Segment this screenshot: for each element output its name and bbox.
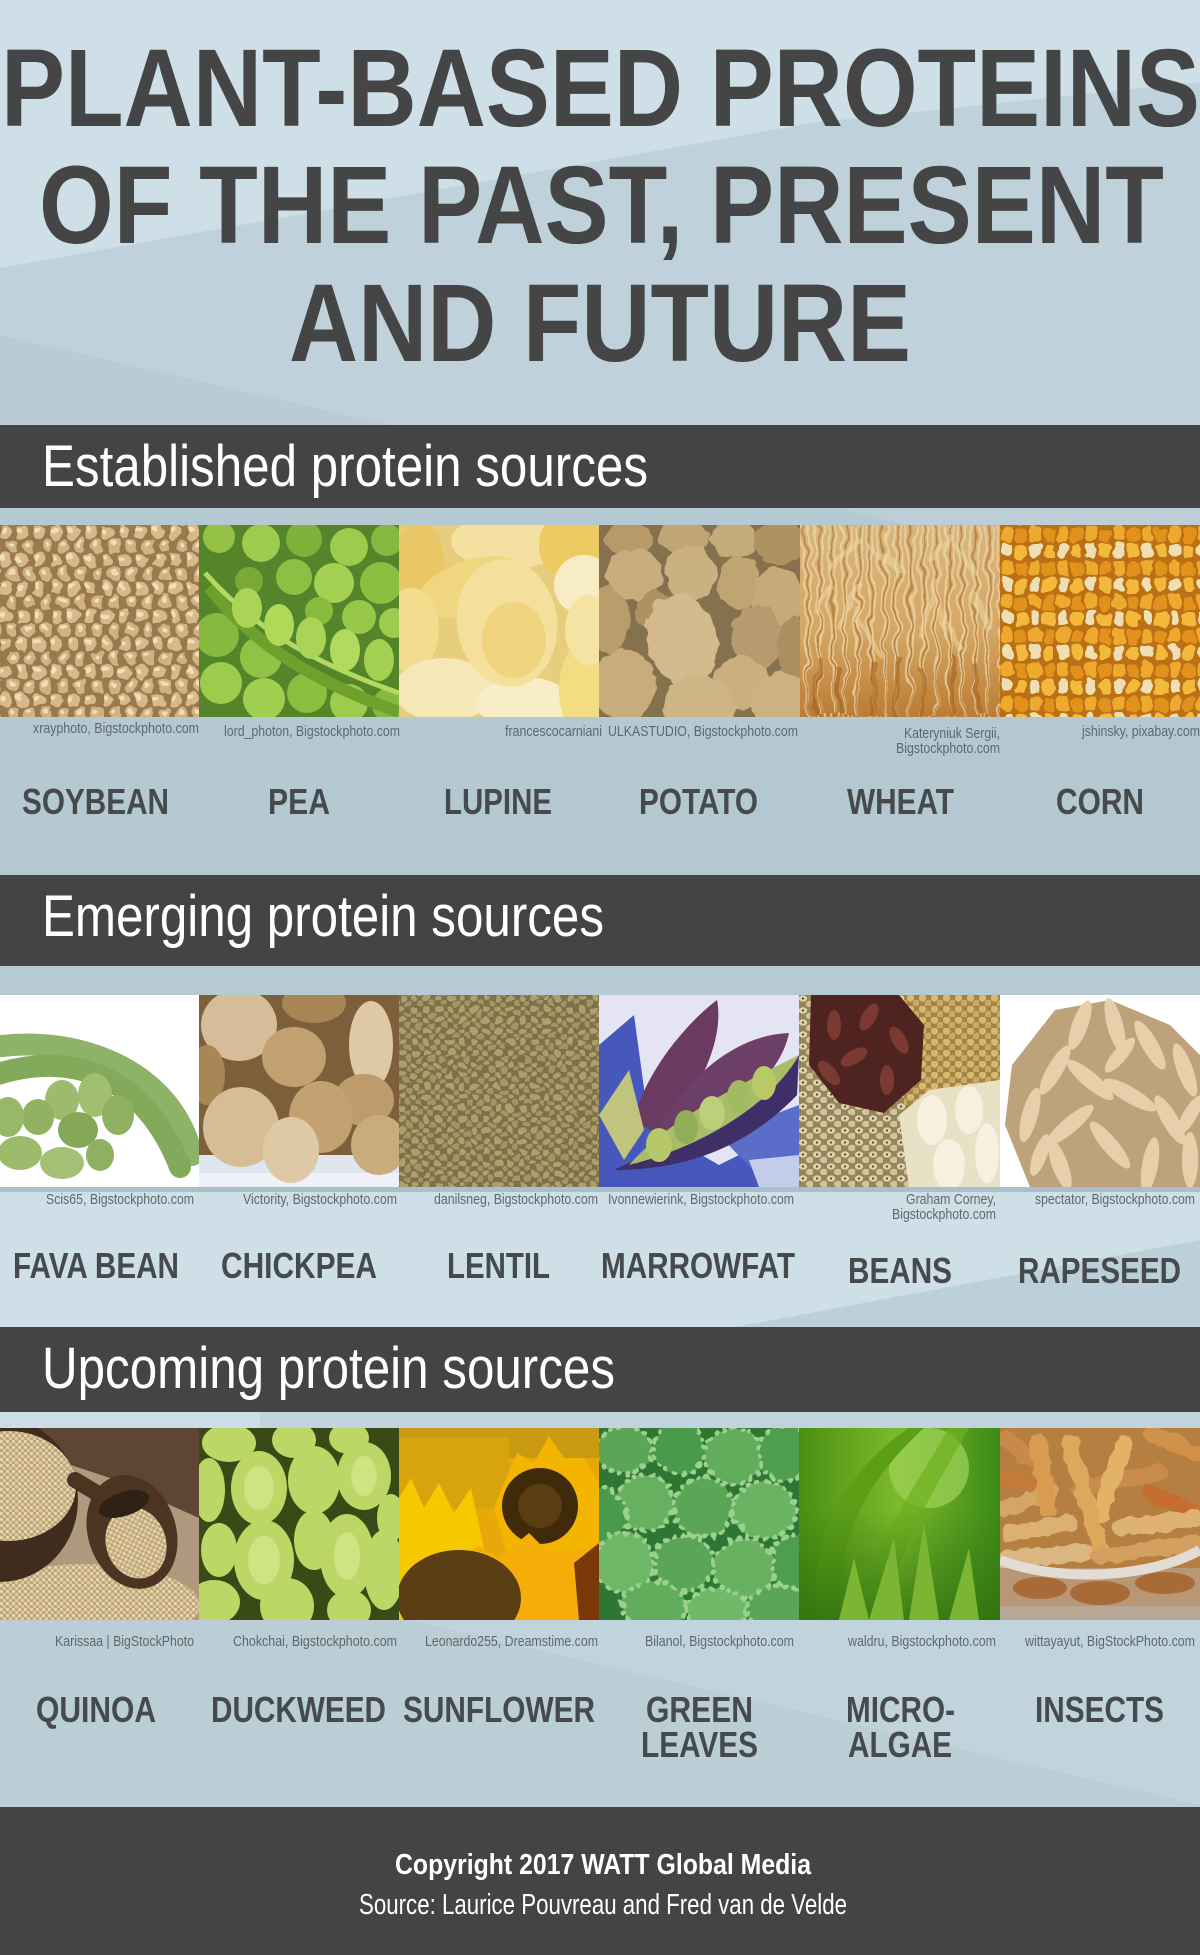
section header: established: [0, 425, 1200, 508]
label: soybean: SOYBEAN: [22, 781, 169, 822]
photo: fava bean: [0, 995, 199, 1187]
label: lupine: LUPINE: [444, 781, 552, 822]
footer: Copyright 2017 WATT Global Media: [395, 1849, 812, 1881]
credit: lentil: danilsneg, Bigstockphoto.com: [434, 1191, 598, 1208]
credit: duckweed: Chokchai, Bigstockphoto.com: [233, 1633, 397, 1650]
photo: pea: [199, 525, 399, 717]
credit: green leaves: Bilanol, Bigstockphoto.com: [645, 1633, 794, 1650]
credit: chickpea: Victority, Bigstockphoto.com: [243, 1191, 397, 1208]
label: duckweed: DUCKWEED: [211, 1689, 386, 1730]
photo: marrowfat: [599, 995, 799, 1187]
credit: beans: Bigstockphoto.com: [892, 1206, 996, 1223]
credit: wheat: Bigstockphoto.com: [896, 740, 1000, 757]
section header: established: Established protein sources: [42, 434, 648, 499]
title: AND FUTURE: [289, 262, 911, 385]
credit: wheat: Kateryniuk Sergii,: [904, 725, 1000, 742]
label: fava bean: FAVA BEAN: [13, 1245, 179, 1286]
label: micro-algae: MICRO-: [846, 1689, 955, 1730]
photo: rapeseed: [1000, 995, 1200, 1187]
credit: quinoa: Karissaa | BigStockPhoto: [55, 1633, 194, 1650]
credit: fava bean: Scis65, Bigstockphoto.com: [46, 1191, 194, 1208]
label: pea: PEA: [268, 781, 330, 822]
photo: beans: [799, 995, 1000, 1187]
credit: sunflower: Leonardo255, Dreamstime.com: [425, 1633, 598, 1650]
label: micro-algae: ALGAE: [848, 1724, 952, 1765]
section header: upcoming: [0, 1327, 1200, 1412]
label: sunflower: SUNFLOWER: [403, 1689, 595, 1730]
photo: quinoa: [0, 1428, 199, 1620]
photo: duckweed: [199, 1428, 399, 1620]
photo: lupine: [399, 525, 599, 717]
photo: sunflower: [399, 1428, 599, 1620]
credit: pea: lord_photon, Bigstockphoto.com: [224, 723, 400, 740]
label: wheat: WHEAT: [847, 781, 954, 822]
photo: microalgae: [799, 1428, 1000, 1620]
credit: potato: ULKASTUDIO, Bigstockphoto.com: [608, 723, 798, 740]
photo: potato: [599, 525, 800, 717]
credit: beans: [892, 1191, 996, 1223]
photo: insects: [1000, 1428, 1200, 1620]
label: insects: INSECTS: [1035, 1689, 1164, 1730]
credit: lupine: francescocarniani: [505, 723, 602, 740]
label: quinoa: QUINOA: [36, 1689, 156, 1730]
photo: lentil: [399, 995, 599, 1187]
label: beans: BEANS: [848, 1250, 952, 1291]
section header: emerging: Emerging protein sources: [42, 884, 604, 949]
label: green leaves: [641, 1689, 758, 1765]
section header: upcoming: Upcoming protein sources: [42, 1336, 615, 1401]
photo: soybean: [0, 525, 199, 717]
credit: wheat: [896, 725, 1000, 757]
label: corn: CORN: [1056, 781, 1144, 822]
label: potato: POTATO: [639, 781, 758, 822]
title: [1, 27, 1200, 385]
label: green leaves: GREEN: [646, 1689, 753, 1730]
label: micro-algae: [846, 1689, 955, 1765]
section header: emerging: [0, 875, 1200, 966]
footer: [0, 1807, 1200, 1955]
label: marrowfat: MARROWFAT: [601, 1245, 795, 1286]
label: green leaves: LEAVES: [641, 1724, 758, 1765]
credit: microalgae: waldru, Bigstockphoto.com: [847, 1633, 996, 1650]
photo: wheat: [800, 525, 1000, 717]
credit: beans: Graham Corney,: [906, 1191, 996, 1208]
photo: corn: [1000, 525, 1200, 717]
footer: Source: Laurice Pouvreau and Fred van de Velde: [359, 1889, 847, 1921]
label: chickpea: CHICKPEA: [221, 1245, 377, 1286]
label: lentil: LENTIL: [447, 1245, 550, 1286]
credit: marrowfat: Ivonnewierink, Bigstockphoto.com: [608, 1191, 794, 1208]
photo: chickpea: [199, 995, 399, 1187]
credit: soybean: xrayphoto, Bigstockphoto.com: [33, 720, 199, 737]
photo: green leaves: [599, 1428, 799, 1620]
